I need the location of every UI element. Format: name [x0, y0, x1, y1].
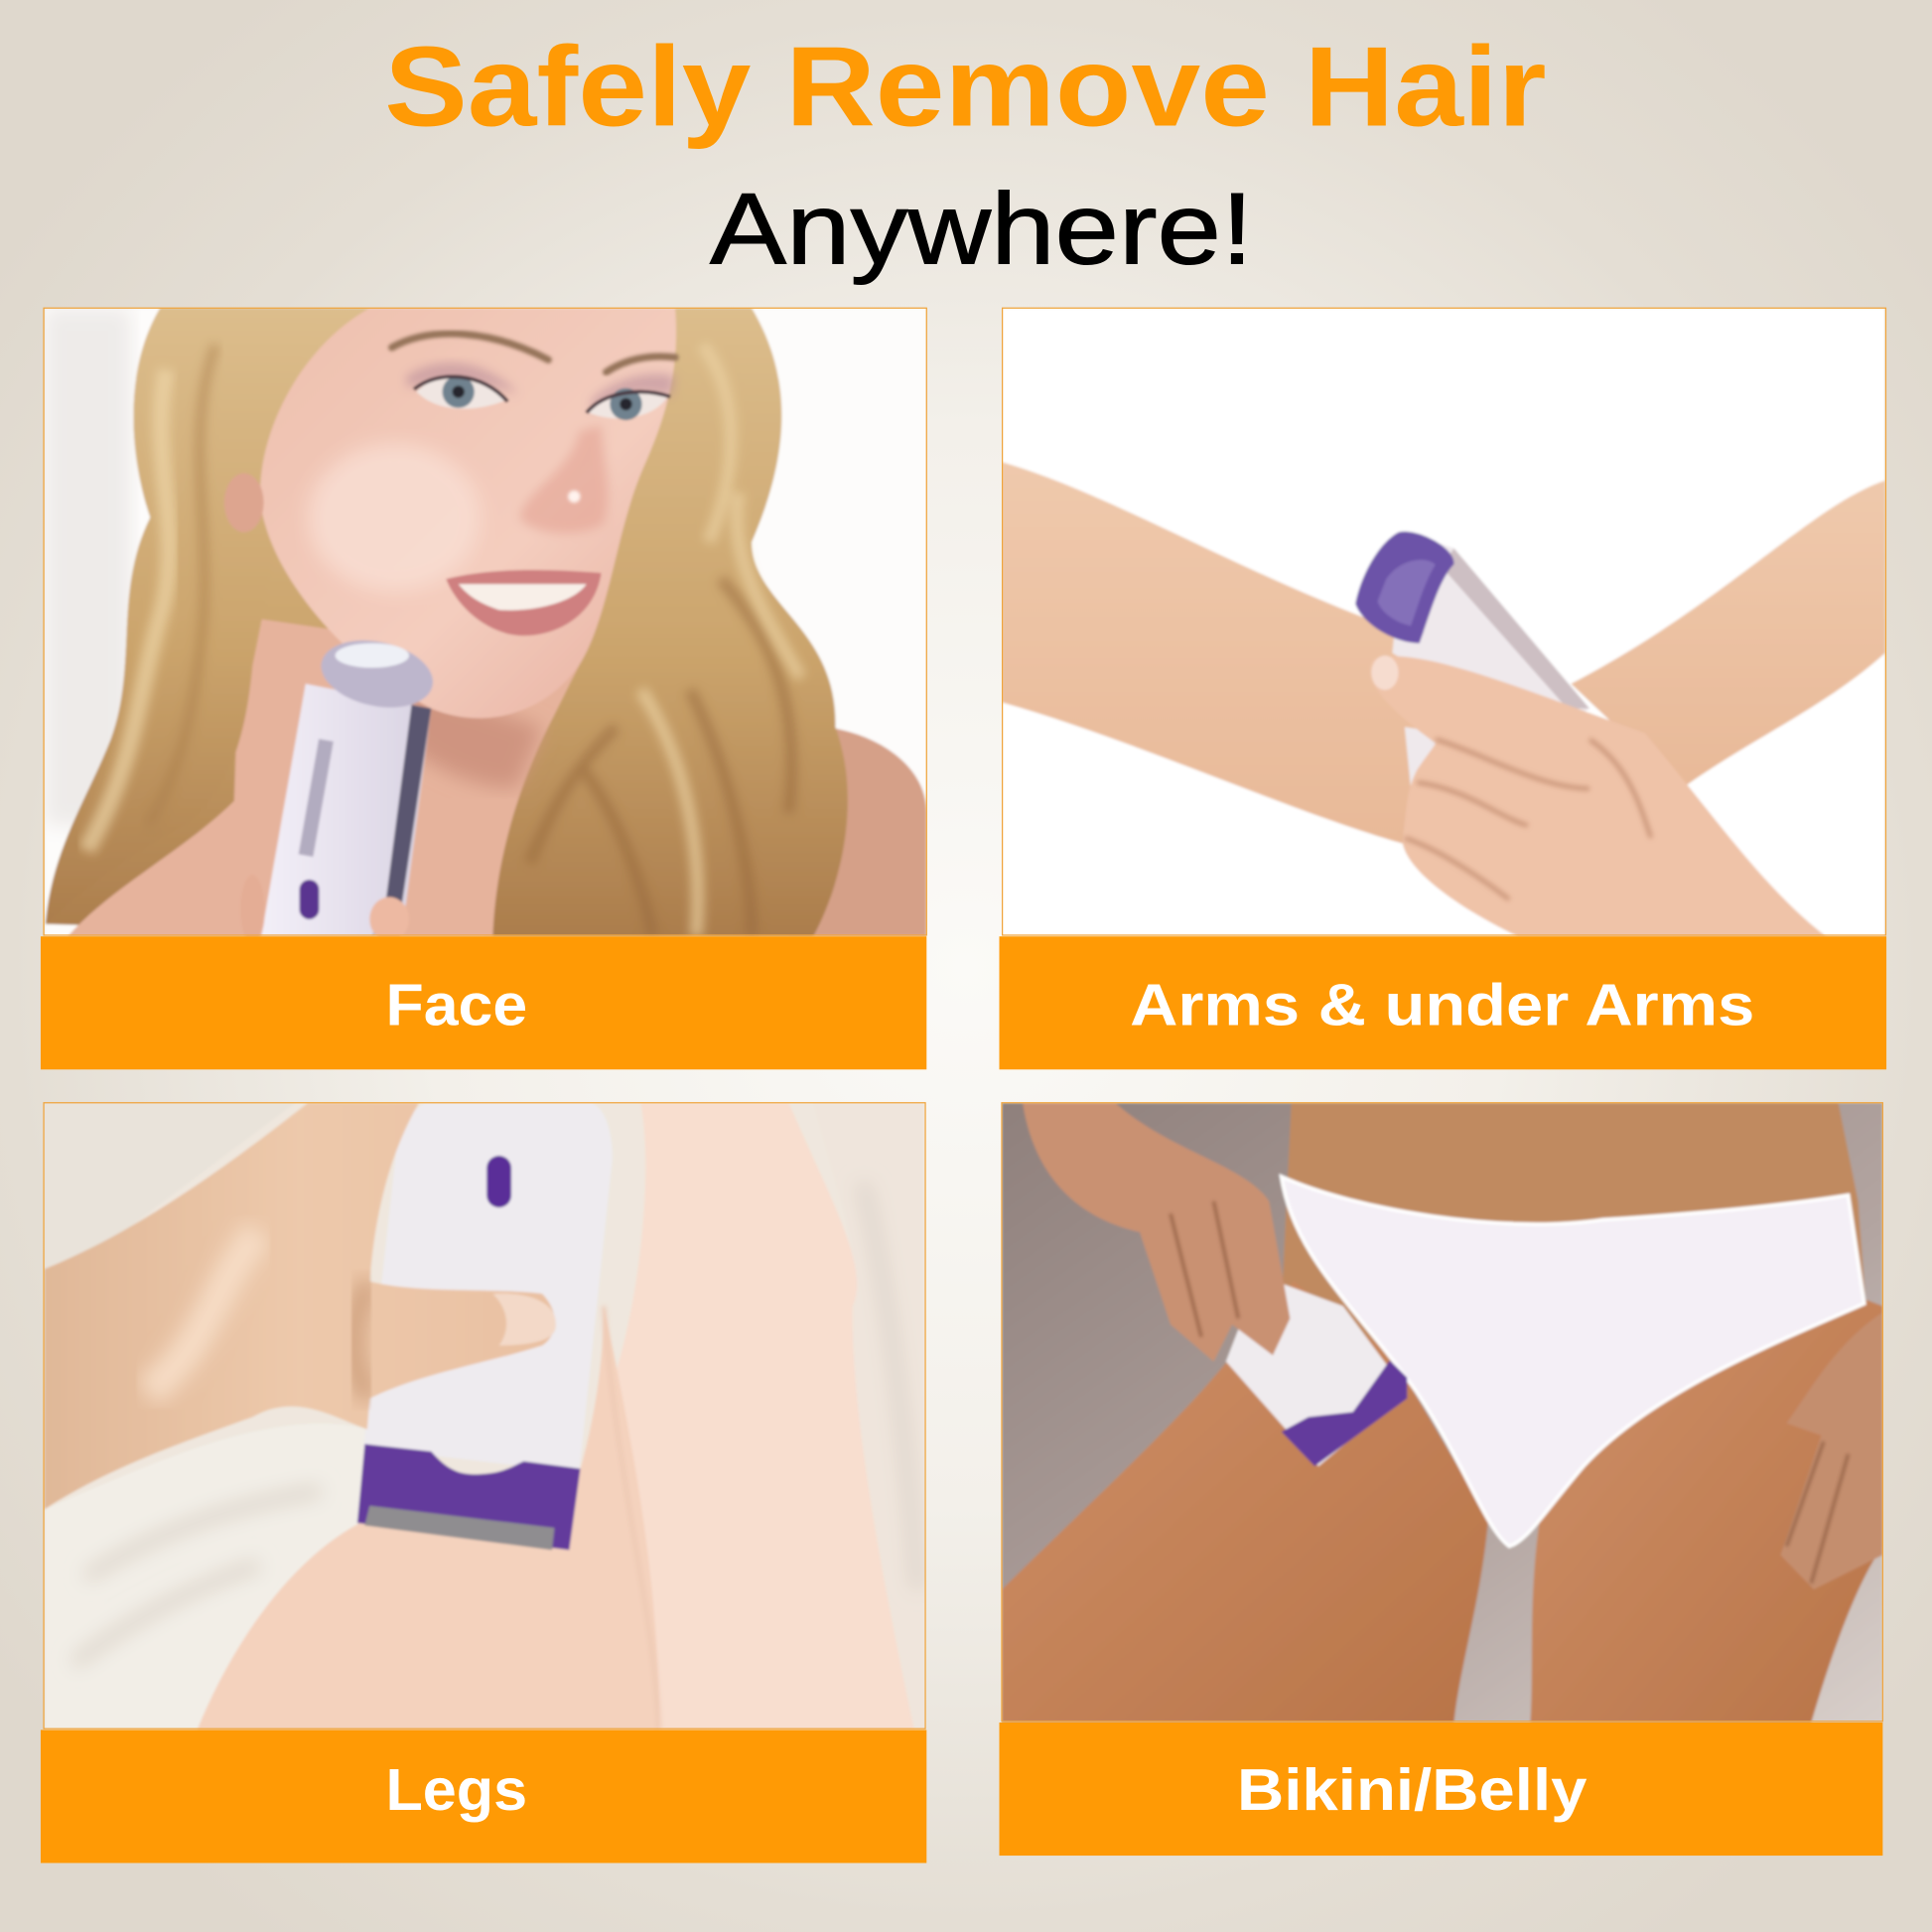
nose [520, 425, 608, 533]
label bar: Legs: Legs [385, 1756, 527, 1823]
hand [1370, 656, 1826, 936]
hair strands [530, 579, 791, 936]
panel: arms and under arms [1000, 308, 1886, 1069]
cheek blush [308, 444, 481, 592]
left hair front [234, 616, 262, 751]
heading: Safely Remove Hair: Safely Remove Hair [384, 25, 1547, 151]
eye left [414, 376, 507, 409]
label bar: Bikini/Belly [1000, 1723, 1882, 1856]
left arm [1003, 461, 1417, 844]
panel: bikini and belly [1000, 1103, 1882, 1856]
device [357, 1103, 613, 1550]
hair mass [46, 308, 848, 936]
panel: legs [41, 1103, 926, 1863]
ear [224, 474, 264, 532]
left thigh [1002, 1282, 1488, 1723]
blanket [45, 1424, 369, 1729]
left hand [1023, 1103, 1290, 1361]
label bar: Face [41, 936, 926, 1069]
hand [45, 1103, 555, 1509]
eyebrows [392, 334, 675, 372]
right thigh [1530, 1300, 1882, 1723]
face shape [260, 308, 676, 718]
fingertip [369, 897, 409, 941]
shoulder [812, 727, 927, 937]
label bar: Arms & under Arms [1000, 936, 1886, 1069]
photo: arm with device [1002, 308, 1885, 936]
neck and chest [68, 617, 579, 936]
panel: face [41, 308, 926, 1069]
right arm [1571, 481, 1885, 788]
left leg [198, 1307, 659, 1729]
label bar: Bikini/Belly: Bikini/Belly [1237, 1756, 1587, 1823]
photo: device on leg [45, 1103, 925, 1729]
label bar: Legs [41, 1729, 926, 1863]
blanket folds [73, 1182, 918, 1663]
title [384, 25, 1547, 286]
right leg [613, 1103, 914, 1729]
label bar: Arms & under Arms: Arms & under Arms [1130, 972, 1754, 1038]
torso and hips [1282, 1103, 1866, 1478]
lips [446, 570, 602, 635]
finger creases [1405, 740, 1651, 899]
eye shadow [407, 362, 675, 413]
device [240, 630, 439, 944]
label bar: Face: Face [385, 972, 527, 1038]
briefs [1282, 1176, 1864, 1547]
device [1354, 530, 1589, 786]
device [1226, 1276, 1407, 1466]
photo: device at bikini line [1002, 1103, 1882, 1723]
photo: woman holding device to her face [45, 308, 926, 944]
right hand [1780, 1312, 1882, 1589]
eye right [587, 388, 670, 420]
heading: Anywhere!: Anywhere! [710, 173, 1253, 286]
